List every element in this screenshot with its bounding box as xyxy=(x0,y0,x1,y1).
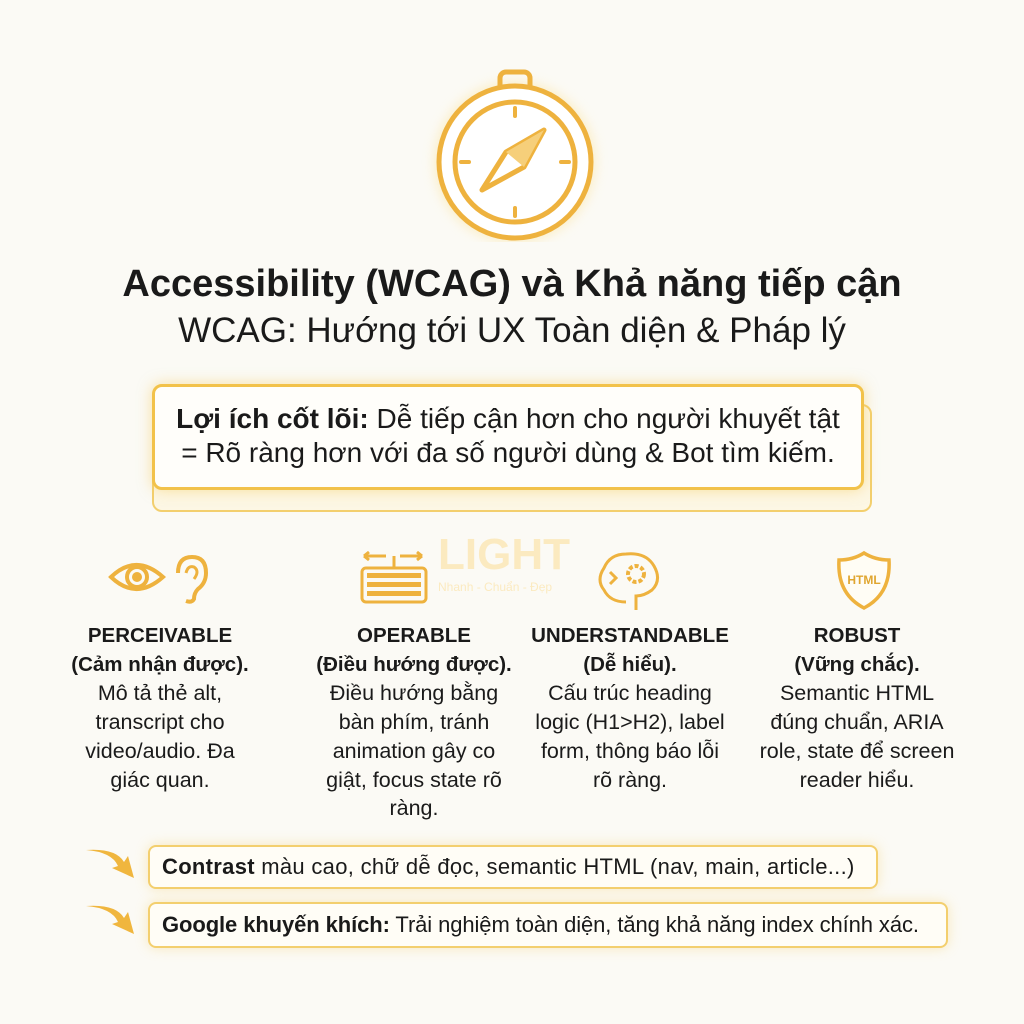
column: understandable: rõ ràng. xyxy=(593,768,667,792)
column: perceivable: video/audio. Đa xyxy=(85,739,235,763)
column: operable: OPERABLE xyxy=(357,624,471,647)
column: operable: giật, focus state rõ xyxy=(326,768,502,792)
arrow 2 xyxy=(86,906,134,934)
icon: HTML shield xyxy=(837,550,891,610)
column: operable: (Điều hướng được). xyxy=(316,653,512,676)
column: understandable: Cấu trúc heading xyxy=(548,681,712,705)
column: understandable: UNDERSTANDABLE xyxy=(531,624,729,647)
icon: brain with gear xyxy=(598,552,660,610)
callout: core benefit: = Rõ ràng hơn với đa số người dùng & Bot tìm kiếm. xyxy=(181,437,835,468)
column: perceivable: PERCEIVABLE xyxy=(88,624,232,647)
column: robust: Semantic HTML xyxy=(780,681,934,705)
column: perceivable xyxy=(71,624,249,792)
column: robust: (Vững chắc). xyxy=(794,653,920,676)
column: understandable: form, thông báo lỗi xyxy=(541,739,719,763)
title: Accessibility (WCAG) và Khả năng tiếp cận xyxy=(122,263,902,305)
callout: google xyxy=(148,902,948,948)
callout: contrast xyxy=(148,845,878,889)
column: perceivable: giác quan. xyxy=(110,768,210,792)
icon: keyboard xyxy=(360,550,428,604)
icon: compass xyxy=(430,70,600,242)
icon: eye and ear xyxy=(108,555,208,604)
arrow 1 xyxy=(86,850,134,878)
column: robust xyxy=(760,624,954,792)
column: perceivable: (Cảm nhận được). xyxy=(71,653,249,676)
callout: google: Google khuyến khích: Trải nghiệm toàn diện, tăng khả năng index chính xác. xyxy=(162,912,919,937)
column: robust: đúng chuẩn, ARIA xyxy=(770,710,944,734)
watermark: Nhanh - Chuẩn - Đẹp xyxy=(438,580,552,594)
callout: contrast: Contrast màu cao, chữ dễ đọc, semantic HTML (nav, main, article...) xyxy=(162,854,855,879)
column: perceivable: transcript cho xyxy=(95,710,225,734)
column: operable: Điều hướng bằng xyxy=(330,681,498,705)
column: understandable: (Dễ hiểu). xyxy=(583,653,677,676)
column: robust: reader hiểu. xyxy=(800,768,914,792)
subtitle: WCAG: Hướng tới UX Toàn diện & Pháp lý xyxy=(178,311,846,350)
column: robust: ROBUST xyxy=(814,624,900,647)
callout: core benefit: Lợi ích cốt lõi: Dễ tiếp cận hơn cho người khuyết tật xyxy=(176,403,840,434)
column: understandable: logic (H1>H2), label xyxy=(535,710,725,734)
column: understandable xyxy=(531,624,729,792)
callout: core benefit xyxy=(143,375,873,512)
column: robust: role, state để screen xyxy=(760,739,954,763)
column: operable: ràng. xyxy=(389,796,438,820)
column: operable xyxy=(316,624,512,820)
icon: HTML shield: HTML xyxy=(847,573,881,587)
column: perceivable: Mô tả thẻ alt, xyxy=(98,681,222,705)
watermark: LIGHT xyxy=(438,530,570,579)
column: operable: bàn phím, tránh xyxy=(339,710,489,734)
column: operable: animation gây co xyxy=(333,739,495,763)
